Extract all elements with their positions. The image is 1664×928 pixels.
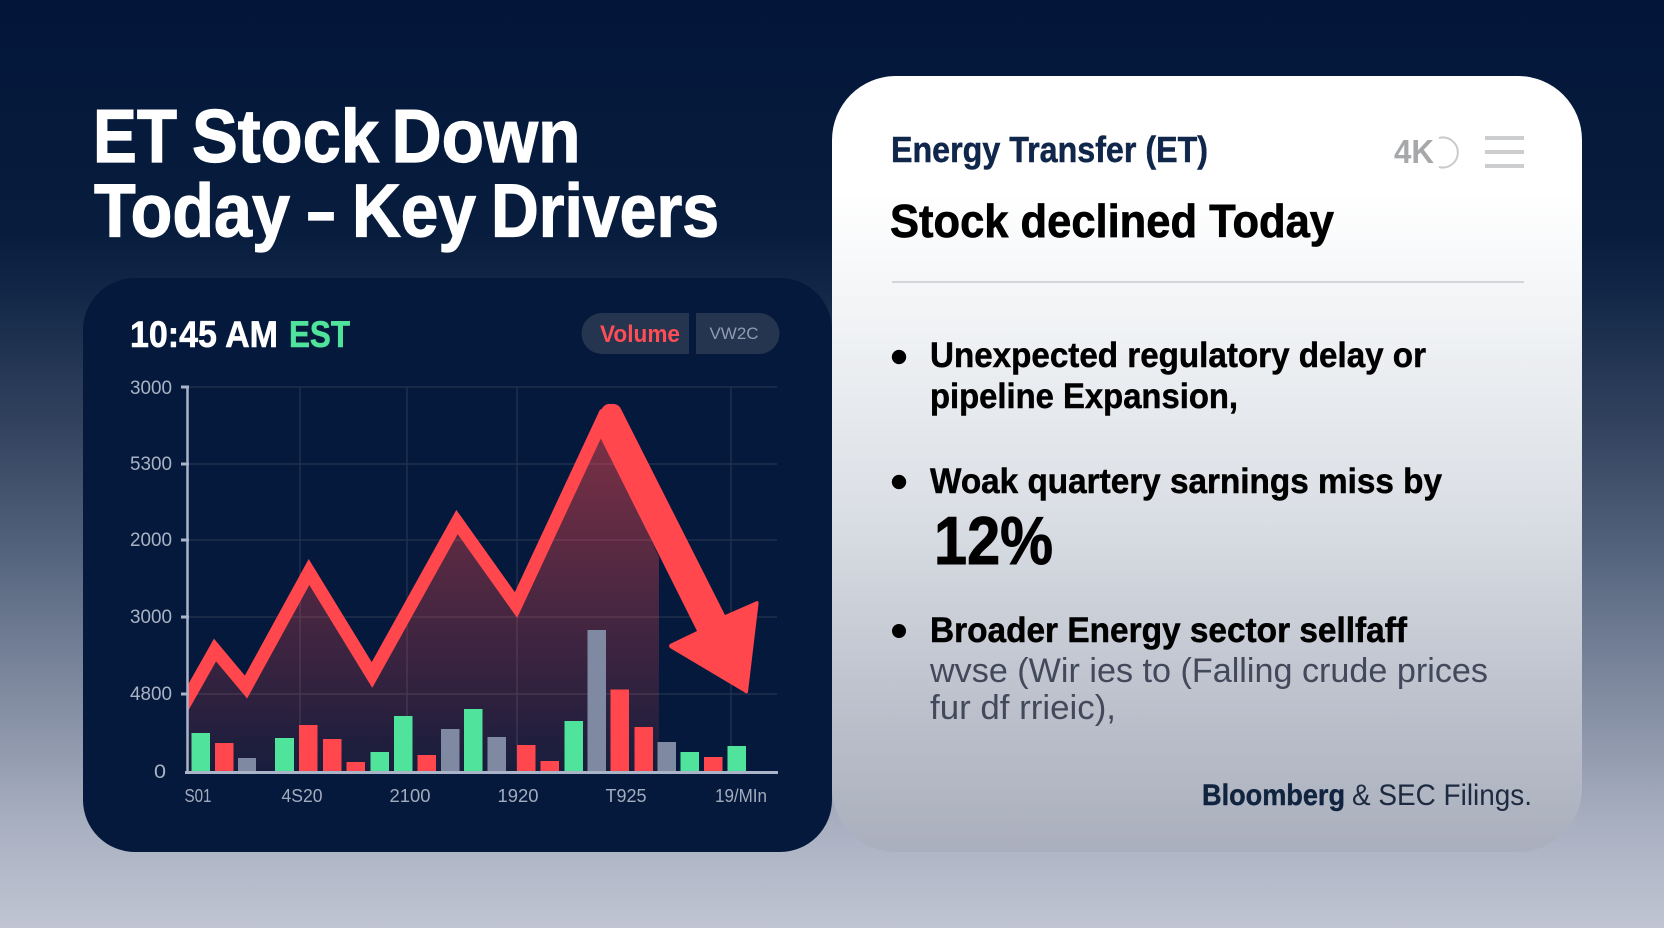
chart time label: EST bbox=[289, 314, 350, 355]
bullet 1: Unexpected regulatory delay or bbox=[930, 336, 1426, 375]
volume toggle bbox=[582, 313, 779, 354]
x axis labels: 19/MIn bbox=[715, 786, 767, 806]
y axis labels bbox=[130, 378, 172, 783]
title: ET bbox=[93, 94, 177, 178]
card company name: Energy Transfer (ET) bbox=[891, 129, 1208, 170]
y axis labels: 4800 bbox=[130, 684, 172, 705]
x axis labels: 4S20 bbox=[282, 786, 322, 806]
y axis labels: 5300 bbox=[130, 454, 172, 475]
price line with down arrow bbox=[180, 404, 759, 712]
y axis labels: 3000 bbox=[130, 378, 172, 399]
title: Drivers bbox=[491, 168, 719, 252]
bullet 1: pipeline Expansion, bbox=[930, 377, 1238, 416]
bullet 3: Broader Energy sector sellfaff bbox=[930, 611, 1407, 650]
bullet 3 bbox=[892, 611, 1488, 727]
source credit bbox=[1202, 779, 1532, 812]
title: Stock bbox=[192, 94, 379, 178]
volume bars bbox=[192, 630, 746, 772]
x axis labels: 2100 bbox=[390, 786, 430, 806]
bullet 2: 12% bbox=[934, 503, 1053, 579]
x axis labels: 1920 bbox=[498, 786, 538, 806]
y axis labels: 2000 bbox=[130, 530, 172, 551]
y axis labels: 3000 bbox=[130, 607, 172, 628]
y axis labels: 0 bbox=[154, 762, 166, 783]
bullet 2 bbox=[892, 462, 1442, 579]
bullet 2: Woak quartery sarnings miss by bbox=[930, 462, 1442, 501]
area under price line bbox=[188, 430, 659, 772]
title: Today bbox=[94, 168, 290, 252]
volume toggle: Volume bbox=[600, 321, 680, 348]
bullet 1 bbox=[892, 336, 1426, 416]
chart axes bbox=[181, 387, 778, 773]
icon: menu bbox=[1485, 136, 1524, 168]
title bbox=[93, 94, 719, 252]
x axis labels: S01 bbox=[184, 786, 212, 806]
card heading: Stock declined Today bbox=[890, 195, 1334, 247]
panel: stock chart bbox=[83, 278, 832, 852]
volume toggle: VW2C bbox=[710, 324, 758, 343]
icon: 4K badge: 4K bbox=[1394, 133, 1434, 170]
icon: 4K badge bbox=[1394, 133, 1458, 170]
title: Key bbox=[352, 168, 476, 252]
x axis labels: T925 bbox=[606, 786, 646, 806]
x axis labels bbox=[184, 786, 767, 806]
chart grid bbox=[188, 387, 777, 772]
bullet 3: wvse (Wir ies to (Falling crude prices bbox=[929, 652, 1488, 690]
title: Down bbox=[392, 94, 580, 178]
source credit: Bloomberg bbox=[1202, 779, 1345, 812]
panel: key drivers card bbox=[832, 76, 1582, 852]
source credit: & SEC Filings. bbox=[1352, 779, 1532, 812]
bullet 3: fur df rrieic), bbox=[930, 689, 1116, 727]
title: – bbox=[307, 168, 335, 252]
chart time label: 10:45 AM bbox=[130, 314, 278, 355]
